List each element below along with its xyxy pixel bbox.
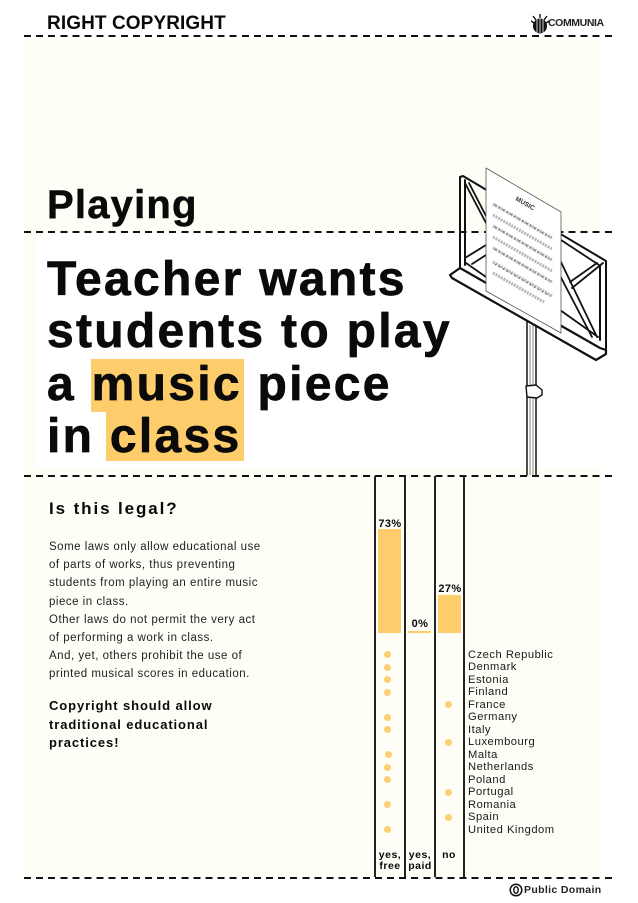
body text: Some laws only allow educational use [49, 541, 261, 553]
white title band [36, 233, 600, 468]
body text: of performing a work in class. [49, 632, 214, 644]
score title: MUSIC [514, 196, 536, 212]
body text: of parts of works, thus preventing [49, 559, 235, 571]
chart: survey results: no [442, 849, 456, 861]
license: public domain: Public Domain [524, 884, 601, 896]
chart: survey results [374, 476, 465, 877]
body text: printed musical scores in education. [49, 668, 250, 680]
title [47, 253, 452, 463]
title: students to play [47, 305, 452, 358]
country list [468, 648, 555, 836]
title: in class [47, 410, 242, 463]
chart: survey results: free [379, 860, 401, 872]
country list: Denmark [468, 661, 517, 673]
body text: piece in class. [49, 596, 129, 608]
title: Teacher wants [47, 253, 407, 306]
chart: survey results: 0% [412, 618, 428, 630]
logo: Communia [531, 14, 604, 34]
country list: Czech Republic [468, 648, 553, 660]
illustration: music stand [448, 168, 608, 476]
header: Right Copyright: RIGHT COPYRIGHT [47, 13, 226, 34]
body text: And, yet, others prohibit the use of [49, 650, 242, 662]
chart: survey results: 73% [378, 518, 402, 530]
chart: survey results: yes, [409, 849, 431, 861]
country list: Luxembourg [468, 736, 535, 748]
country list: Portugal [468, 786, 514, 798]
chart: survey results: 27% [438, 583, 462, 595]
country list: Malta [468, 748, 498, 760]
category heading: Playing: Playing [47, 183, 198, 227]
logo: Communia: COMMUNIA [548, 17, 604, 29]
chart: survey results: yes, [379, 849, 401, 861]
call to action: Copyright should allow [49, 698, 213, 713]
body text [49, 541, 261, 680]
call to action: traditional educational [49, 716, 208, 732]
country list: Germany [468, 711, 518, 723]
call to action [49, 698, 213, 750]
chart: survey results: paid [408, 860, 432, 872]
highlight: music [91, 359, 244, 412]
country list: Spain [468, 811, 499, 823]
country list: Finland [468, 686, 508, 698]
body text: students from playing an entire music [49, 577, 258, 589]
country list: Italy [468, 724, 491, 736]
country list: France [468, 698, 506, 710]
country list: Romania [468, 798, 516, 810]
title: a music piece [47, 358, 392, 411]
section heading: Is this legal? [49, 499, 179, 518]
country list: Netherlands [468, 761, 534, 773]
country list: United Kingdom [468, 824, 555, 836]
body text: Other laws do not permit the very act [49, 614, 255, 626]
country list: Estonia [468, 674, 509, 686]
highlight: class [106, 412, 244, 461]
call to action: practices! [49, 735, 119, 750]
country list: Poland [468, 774, 506, 786]
